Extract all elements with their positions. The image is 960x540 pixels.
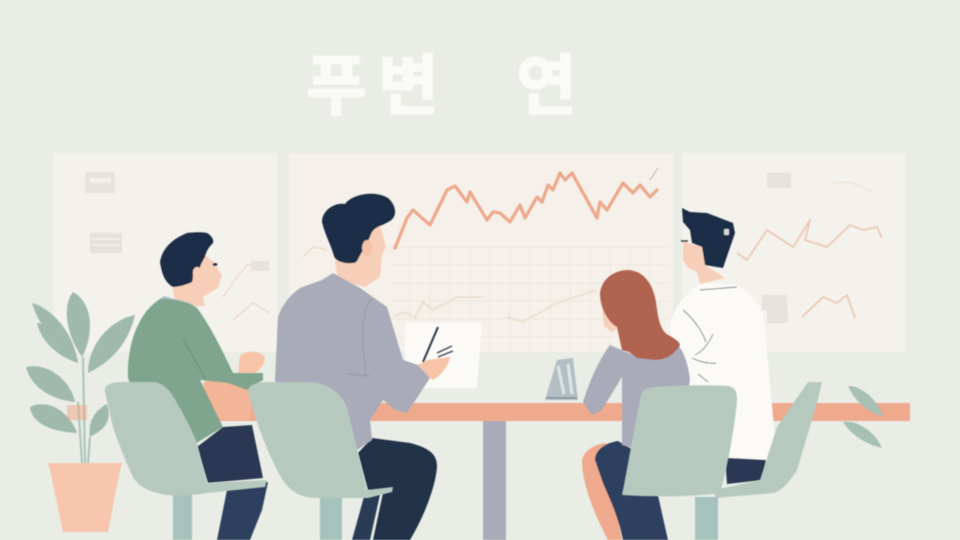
hair [322, 194, 395, 263]
hair [160, 232, 213, 287]
neck and face [335, 215, 386, 287]
title: 푸 [306, 49, 367, 123]
chair leg [320, 498, 342, 540]
long hair [600, 270, 680, 360]
face [602, 300, 622, 332]
pants: rear leg [352, 490, 381, 540]
label block: upper [85, 172, 115, 193]
chair: right [622, 382, 822, 540]
person: woman with auburn hair [582, 270, 690, 540]
pants [197, 425, 263, 483]
label block: lower [90, 233, 122, 253]
lower leg [217, 482, 268, 540]
hand [418, 357, 450, 380]
panel: right chart board [682, 153, 905, 352]
chair shell [248, 382, 393, 498]
shirt creases [683, 287, 737, 382]
main orange trend line [395, 168, 658, 248]
chair: left [105, 382, 267, 540]
table leg [483, 421, 506, 540]
pen [423, 327, 438, 362]
fingers detail [437, 346, 453, 357]
glass on table [545, 358, 578, 400]
hand [238, 352, 265, 378]
shirt [275, 273, 430, 450]
chair leg [695, 497, 718, 540]
panel: centre chart board [289, 153, 673, 352]
collar [160, 296, 198, 309]
sweater [128, 299, 263, 445]
eye [212, 263, 218, 266]
paper on table [405, 323, 482, 388]
person: man in white shirt [670, 208, 777, 484]
chair back near shell [622, 385, 737, 496]
chart grid [390, 247, 670, 352]
faint line charts [223, 261, 270, 320]
plant in pot [26, 292, 135, 532]
chair back far shell [715, 382, 822, 498]
person: man in gray shirt [275, 194, 453, 540]
label blocks [762, 173, 791, 323]
pants: thigh [358, 438, 437, 540]
ear [362, 240, 372, 256]
title: 변 [378, 49, 439, 123]
decorative leaves right [843, 386, 883, 448]
chair: centre [248, 382, 393, 540]
pants [725, 458, 766, 484]
hair [682, 208, 735, 268]
chair shell [105, 382, 267, 496]
person: man in green sweater [128, 232, 268, 540]
leaves [26, 292, 135, 437]
title [306, 49, 577, 123]
pot [48, 463, 122, 532]
dark skirt and leg [595, 441, 668, 540]
glasses [681, 240, 688, 242]
title: 연 [516, 49, 577, 123]
shirt [670, 283, 777, 460]
stems [78, 357, 90, 463]
chair leg [173, 495, 192, 540]
skin leg [582, 443, 622, 540]
neck and face [683, 240, 725, 284]
panel: left chart board [53, 153, 277, 352]
sweater [583, 340, 690, 450]
hair clip [724, 229, 729, 235]
table [67, 403, 910, 540]
neck and face [172, 250, 222, 306]
faint secondary lines [303, 247, 597, 322]
table top [200, 403, 910, 421]
faint line charts [737, 182, 882, 318]
forearm [203, 370, 252, 420]
